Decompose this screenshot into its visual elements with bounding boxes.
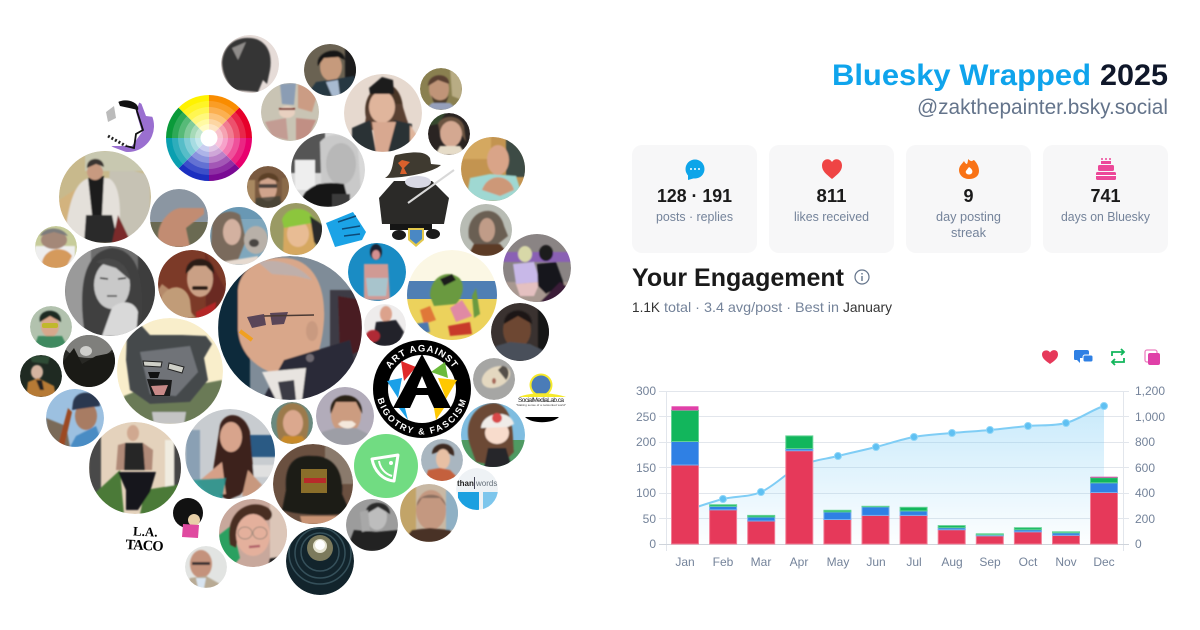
avatar: dark forest sky (63, 334, 116, 390)
engagement summary (632, 299, 892, 315)
panel: day posting streak: day posting (936, 209, 1001, 224)
avatar: la taco logo: TACO (125, 537, 164, 555)
chart legend (1042, 349, 1160, 365)
icon: flame (959, 159, 979, 179)
avatar: man in blue cap (46, 389, 104, 447)
avatar: anime character (461, 403, 525, 468)
month labels: May (827, 555, 849, 569)
left axis labels: 250 (636, 410, 656, 424)
panel: posts and replies (632, 145, 757, 253)
avatar: than words: words (475, 479, 497, 488)
avatar: black and white historic man (346, 499, 398, 551)
panel: likes received: likes received (794, 209, 869, 224)
icon: heart (822, 159, 842, 179)
engagement summary: total · 3.4 avg/post · Best in (664, 299, 839, 315)
icon: replies (1074, 350, 1093, 363)
avatar: man with glasses and books (247, 166, 290, 210)
avatar: social media lab logo: SocialMediaLab.ca (518, 397, 564, 404)
avatar: bear with glasses (117, 318, 223, 424)
icon: likes heart (1042, 350, 1058, 364)
month labels (675, 555, 1115, 569)
cumulative line (685, 406, 1104, 511)
right axis labels: 200 (1135, 512, 1155, 526)
avatar: dark-haired man (304, 44, 360, 96)
month labels: Jun (866, 555, 886, 569)
avatar: mannequin head (473, 358, 515, 400)
month labels: Apr (790, 555, 808, 569)
reposts bars (672, 410, 1118, 535)
panel: days on Bluesky: days on Bluesky (1061, 209, 1150, 224)
month labels: Aug (941, 555, 963, 569)
avatar cluster (20, 35, 571, 595)
panel: days on Bluesky: 741 (1090, 186, 1120, 206)
avatar: smiling man in grey (491, 303, 552, 361)
right axis labels: 400 (1135, 486, 1155, 500)
panel: days on Bluesky (1043, 145, 1168, 253)
avatar: colour wheel (166, 95, 252, 181)
avatar: platypus (150, 189, 208, 248)
icon: info (855, 270, 869, 284)
avatar: person with green sunglasses (30, 306, 72, 348)
engagement chart (636, 384, 1165, 569)
avatar: bald man (185, 546, 227, 588)
panel: day posting streak (906, 145, 1031, 253)
month labels: Feb (713, 555, 734, 569)
avatar: than words (456, 468, 499, 512)
avatar: green pizza logo (354, 434, 418, 498)
avatar: woman on blue (348, 243, 406, 301)
avatar: mafalda cartoon (173, 498, 203, 538)
left axis labels: 50 (643, 512, 656, 526)
heading: your engagement: Your Engagement (632, 264, 845, 292)
line points (720, 402, 1108, 502)
month labels: Jan (675, 555, 695, 569)
avatar: blonde woman smiling (271, 402, 313, 444)
avatar: art against bigotry and fascism logo (373, 340, 471, 438)
avatar: cartoon profile on purple (102, 100, 154, 152)
avatar: blue tickets (326, 212, 366, 247)
avatar: bearded man outdoors (420, 68, 462, 110)
month labels: Sep (979, 555, 1001, 569)
left axis labels: 300 (636, 384, 656, 398)
right axis labels: 1,200 (1135, 384, 1165, 398)
panel: likes received (769, 145, 894, 253)
avatar: social media lab logo (516, 374, 566, 422)
panel: likes received: 811 (816, 186, 846, 206)
avatar: art against bigotry and fascism logo: BIGOTRY & FASCISM (378, 398, 466, 435)
avatar: illustrated woman (421, 439, 463, 482)
avatar: green cap (270, 203, 324, 255)
avatar: la taco logo (125, 523, 165, 555)
engagement summary: 1.1K (632, 299, 661, 315)
left axis labels: 0 (649, 537, 656, 551)
right axis labels (1135, 384, 1165, 551)
avatar: art against bigotry and fascism logo: ART AGAINST (386, 344, 458, 369)
avatar: older man with glasses (400, 484, 460, 542)
avatar: woman with dog (210, 207, 268, 265)
avatar: la taco logo: L.A. (133, 523, 158, 540)
avatar: woman in leather vest (344, 74, 422, 152)
panel: day posting streak: 9 (963, 186, 974, 206)
right axis labels: 800 (1135, 435, 1155, 449)
icon: cake (1096, 158, 1116, 180)
cumulative area (685, 406, 1104, 544)
avatar: curly-haired woman (460, 204, 512, 256)
avatar: tattooed woman sitting (89, 422, 182, 514)
left axis labels (636, 384, 656, 551)
month labels: Dec (1093, 555, 1115, 569)
panel: day posting streak: streak (951, 225, 986, 240)
panel: posts and replies: posts · replies (656, 209, 733, 224)
avatar: tunnel looking up (286, 522, 354, 595)
icon: shield badge (408, 228, 424, 247)
quotes bars (672, 406, 1118, 478)
avatar: zorro cat figure (379, 152, 454, 240)
month labels: Nov (1055, 555, 1077, 569)
avatar: social media lab logo: "Making sense of a networked world" (516, 403, 566, 407)
replies bars (672, 442, 1118, 536)
month labels: Oct (1019, 555, 1038, 569)
engagement summary: January (843, 299, 892, 315)
left axis labels: 200 (636, 435, 656, 449)
avatar: charcoal walrus drawing (221, 35, 279, 93)
axis gridlines (659, 391, 1129, 551)
avatar: bald man smiling in blue shirt (461, 137, 526, 201)
month labels: Jul (906, 555, 922, 569)
icon: quotes (1145, 350, 1160, 365)
avatar: than words: than (457, 479, 474, 488)
icon: reposts (1112, 349, 1124, 365)
avatar: man with red ball (364, 304, 406, 346)
avatar: frog cartoon (407, 250, 497, 341)
right axis labels: 0 (1135, 537, 1142, 551)
avatar: woman in white jacket (59, 151, 151, 243)
avatar: black cap (273, 444, 355, 524)
avatar: person in tan coat (20, 355, 62, 397)
avatar: dark-haired woman (185, 409, 276, 500)
avatar: man with moustache (158, 250, 226, 318)
right axis labels: 1,000 (1135, 410, 1165, 424)
title: Bluesky Wrapped (832, 59, 1091, 92)
avatar: smiling man (316, 387, 374, 445)
avatar: woman close-up (428, 113, 470, 155)
avatar: black and white blonde woman (291, 133, 365, 207)
icon: speech bubble (686, 160, 704, 180)
left axis labels: 100 (636, 486, 656, 500)
right axis labels: 600 (1135, 461, 1155, 475)
panel: posts and replies: 128 · 191 (657, 186, 732, 206)
handle: @zakthepainter.bsky.social (917, 96, 1168, 119)
avatar: man with cat (35, 226, 77, 268)
likes bars (672, 451, 1118, 544)
month labels: Mar (751, 555, 771, 569)
avatar: bald man with sunglasses and cigarette (218, 256, 362, 400)
left axis labels: 150 (636, 461, 656, 475)
avatar: two women in neon room (503, 234, 572, 302)
avatar: painted drawing (261, 83, 319, 141)
avatar: woman with round glasses (219, 499, 288, 567)
avatar: black and white woman (65, 246, 156, 336)
title: 2025 (1100, 59, 1168, 92)
